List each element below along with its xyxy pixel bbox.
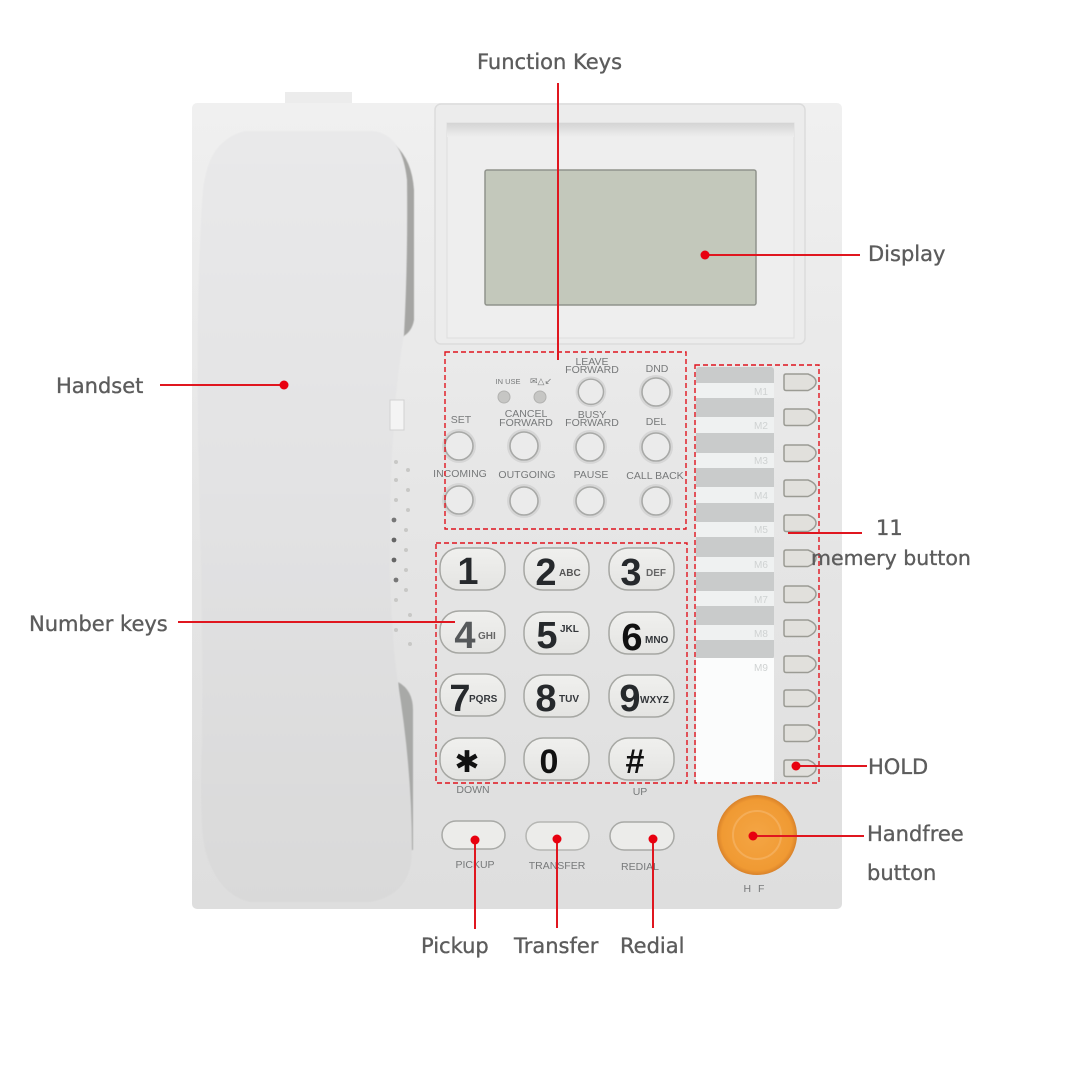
handset rest shadow top [395, 145, 414, 337]
function keys panel: DEL [646, 416, 666, 428]
cradle tab [285, 92, 352, 106]
function keys panel: ✉△↙ [530, 376, 552, 386]
number keys: 7 [449, 678, 471, 720]
handset rest shadow bottom [398, 682, 413, 850]
number keys: MNO [645, 635, 669, 646]
handset [198, 131, 412, 902]
LCD screen [485, 170, 756, 305]
number keys: JKL [560, 624, 579, 635]
number keys: # [626, 743, 645, 781]
callout: handfree [748, 822, 964, 885]
bottom keys [442, 821, 674, 873]
callout: number keys: Number keys [29, 612, 168, 636]
memory buttons [784, 374, 816, 776]
callout: redial: Redial [620, 934, 684, 958]
function keys panel: FORWARD [499, 417, 553, 429]
function keys panel: FORWARD [565, 364, 619, 376]
function keys panel: SET [451, 414, 472, 426]
number keys: DOWN [456, 784, 490, 796]
memory strip: M6 [754, 560, 768, 571]
hook switch [390, 400, 404, 430]
function keys panel: CALL BACK [626, 470, 684, 482]
number keys: 3 [620, 552, 642, 594]
callout: redial [620, 834, 684, 958]
callout: pickup: Pickup [421, 934, 489, 958]
number keys: 9 [619, 678, 641, 720]
memory strip: M9 [754, 663, 768, 674]
number keys: 0 [540, 743, 558, 781]
number keys [440, 548, 674, 798]
number keys: 1 [457, 551, 479, 593]
callout: hold [792, 755, 928, 779]
number keys: TUV [559, 694, 579, 705]
callout: handfree: Handfree [867, 822, 964, 846]
number keys: 2 [535, 552, 557, 594]
function keys panel [433, 356, 684, 518]
function keys panel: OUTGOING [498, 469, 556, 481]
memory strip: M7 [754, 595, 768, 606]
speaker holes [392, 460, 412, 646]
function keys panel: FORWARD [565, 417, 619, 429]
phone body [192, 92, 842, 909]
number keys: 8 [535, 678, 557, 720]
callout: display [700, 242, 945, 266]
function keys panel: PAUSE [574, 469, 608, 481]
callout: handset: Handset [56, 374, 143, 398]
bottom keys: TRANSFER [529, 860, 586, 872]
round keys [576, 376, 606, 407]
callout: memory button [788, 516, 971, 570]
number keys: DEF [646, 568, 666, 579]
memory strip: M1 [754, 387, 768, 398]
number keys: UP [633, 786, 647, 798]
callout: memory button: 11 [876, 516, 903, 540]
number keys: 4 [454, 615, 476, 657]
number keys: 6 [621, 617, 643, 659]
memory strip: M8 [754, 629, 768, 640]
callout: handset [56, 374, 288, 398]
function keys panel: DND [646, 363, 669, 375]
callout: transfer [513, 834, 599, 958]
function keys panel: INCOMING [433, 468, 487, 480]
bottom keys: REDIAL [621, 861, 659, 873]
callout: transfer: Transfer [513, 934, 599, 958]
memory strip [696, 367, 774, 782]
memory strip: M5 [754, 525, 768, 536]
callout: handfree: button [867, 861, 936, 885]
number keys: 5 [536, 615, 558, 657]
bottom keys: PICKUP [455, 859, 495, 871]
base plate [192, 103, 842, 909]
callout: memory button: memery button [811, 546, 971, 570]
callout: display: Display [868, 242, 945, 266]
number keys: GHI [478, 631, 496, 642]
number keys: WXYZ [640, 695, 669, 706]
indicator labels: IN USE [495, 377, 521, 386]
memory strip: M2 [754, 421, 768, 432]
handfree button [717, 795, 797, 895]
key labels: LEAVE [575, 356, 609, 368]
callout: function keys: Function Keys [477, 50, 622, 74]
number keys: ABC [559, 568, 581, 579]
dashed highlight boxes [436, 352, 819, 783]
handfree button: H F [744, 883, 766, 895]
function keys panel: BUSY [578, 409, 606, 421]
display bezel [447, 123, 794, 338]
callout: pickup [421, 836, 489, 958]
memory strip: M3 [754, 456, 768, 467]
function keys panel: CANCEL [505, 408, 547, 420]
callout: hold: HOLD [868, 755, 928, 779]
number keys: ✱ [454, 745, 480, 780]
number keys: PQRS [469, 694, 498, 705]
memory strip: M4 [754, 491, 768, 502]
